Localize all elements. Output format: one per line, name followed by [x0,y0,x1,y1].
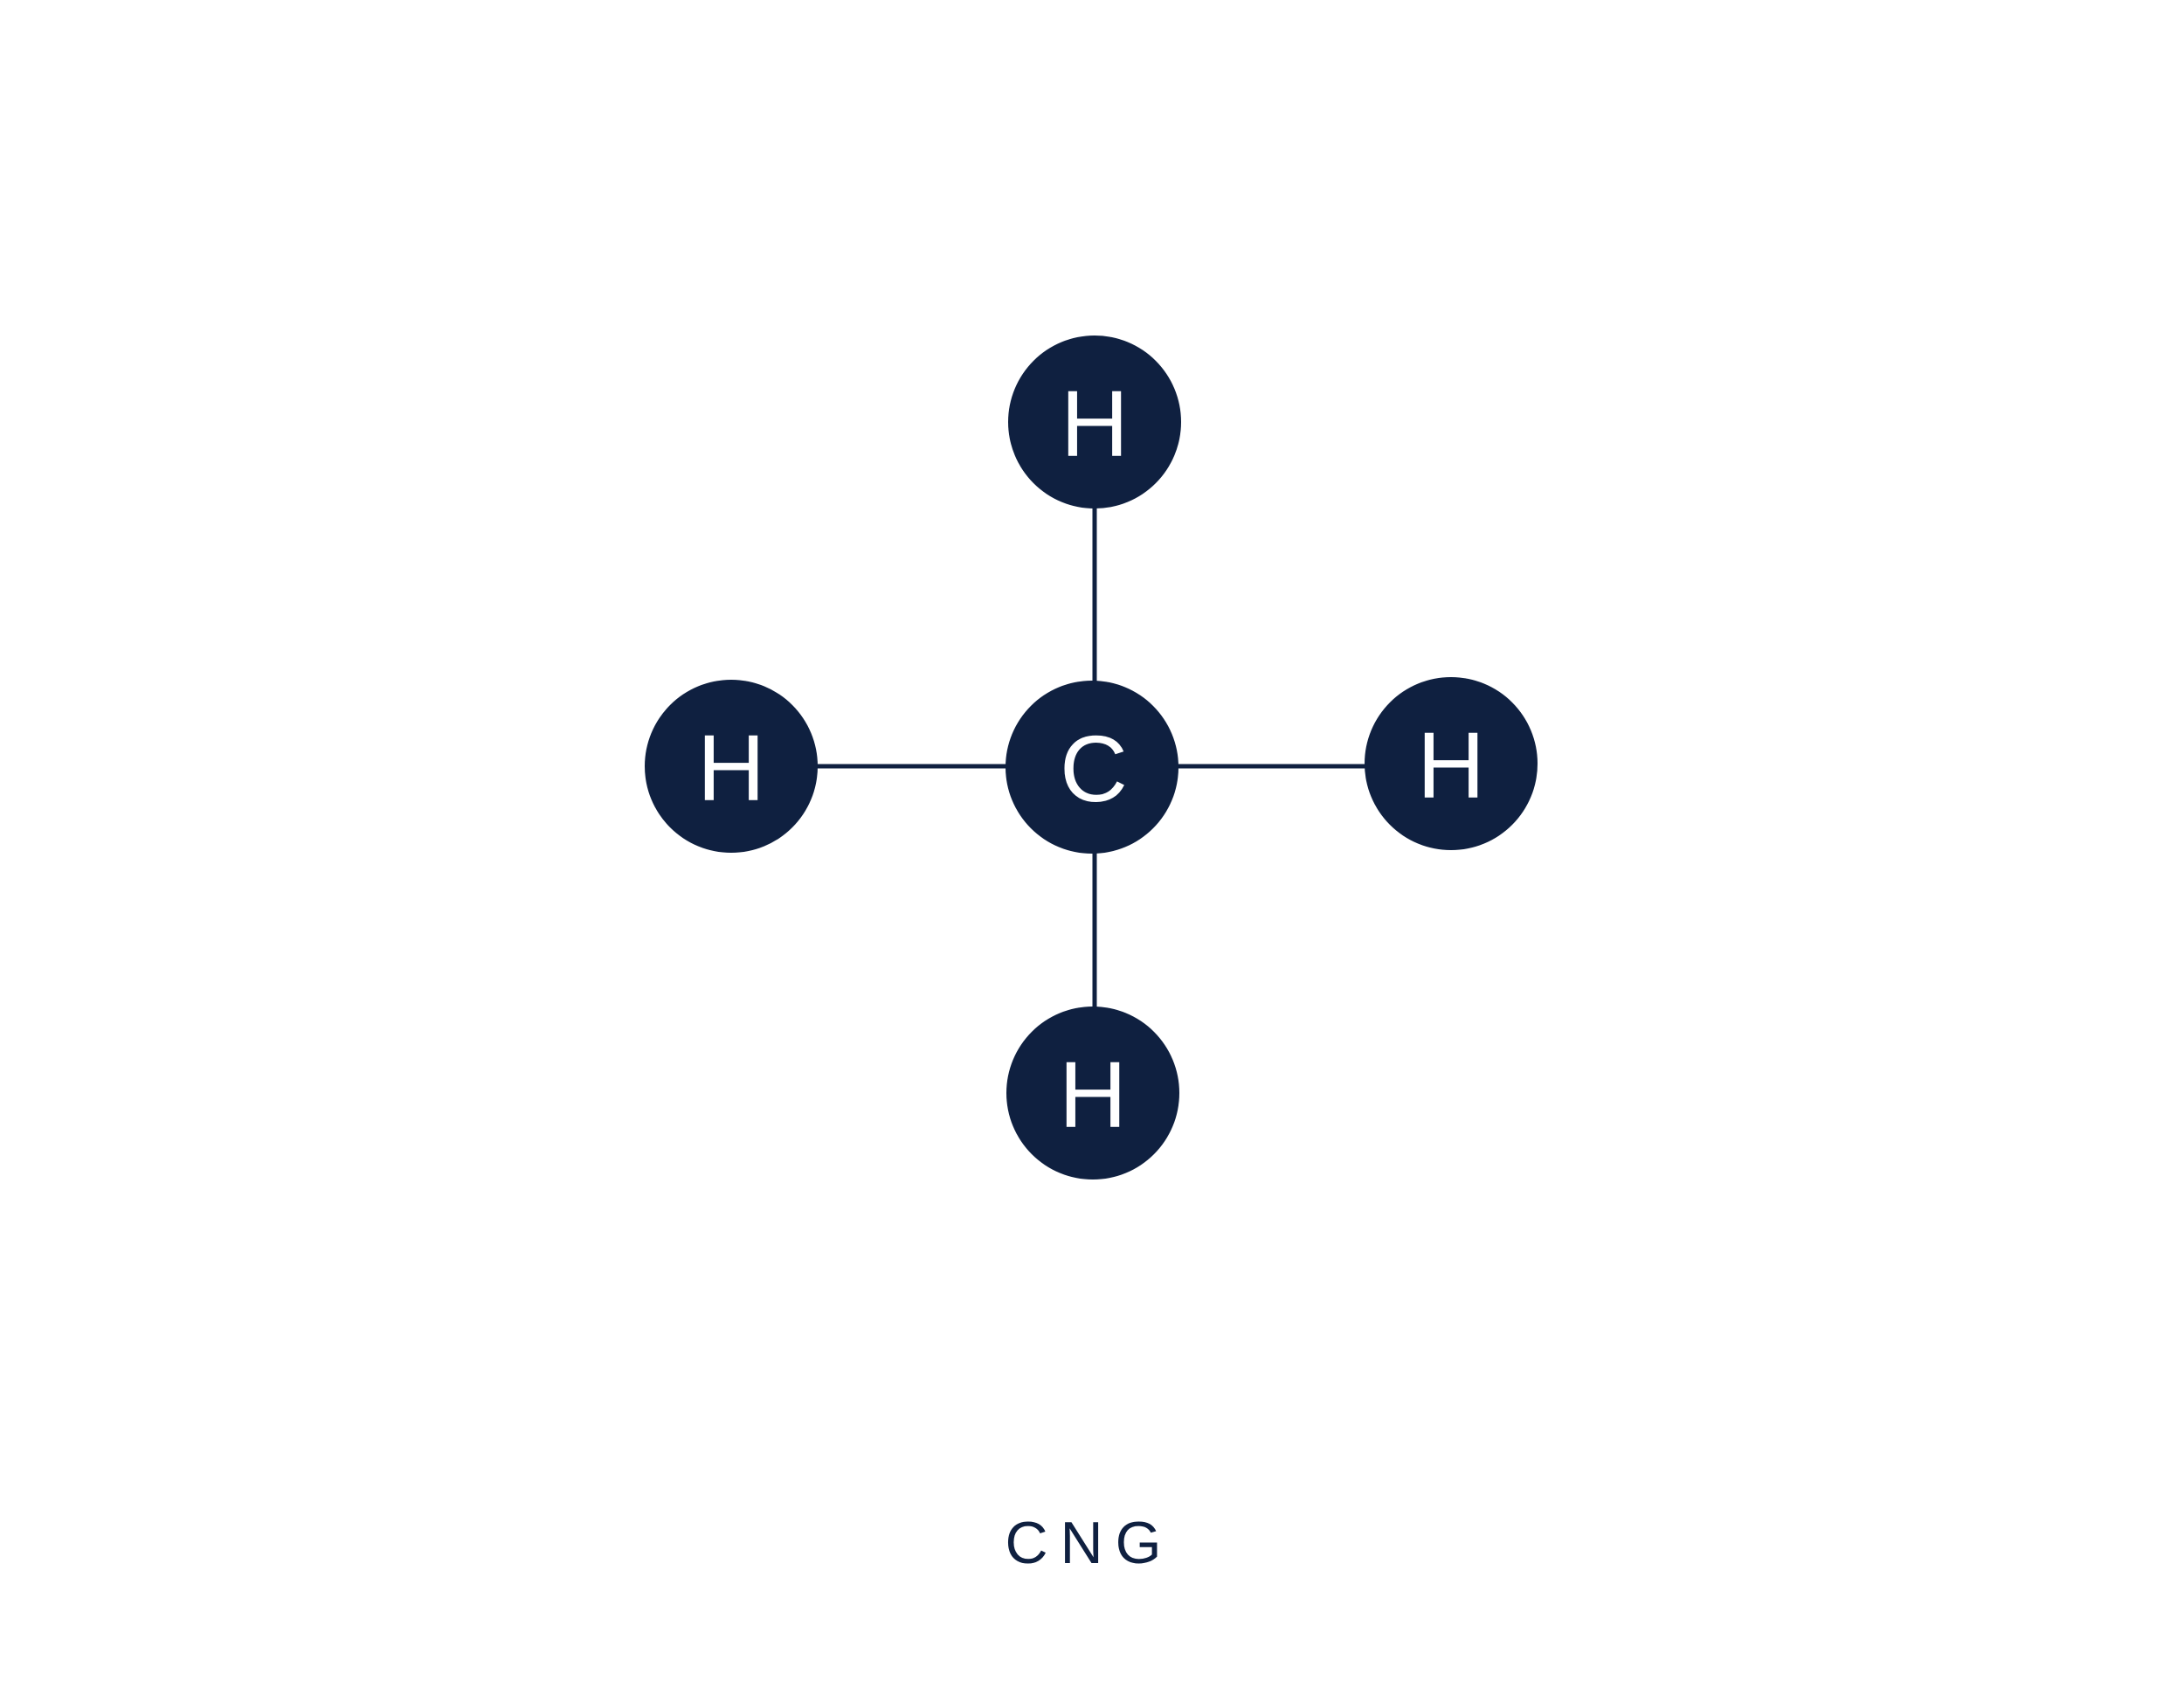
caption: CNG: CNG [1005,1510,1174,1576]
atom: carbon center: C [1060,716,1128,821]
atom: left hydrogen: H [697,715,765,820]
bond: horizontal [731,764,1451,769]
molecule: methane diagram [645,336,1538,1180]
atom: bottom hydrogen: H [1059,1041,1127,1147]
atom: right hydrogen [1365,677,1538,850]
atom: left hydrogen [645,680,818,853]
atom: bottom hydrogen [1006,1007,1179,1180]
atom: carbon center [1006,681,1178,854]
atom: top hydrogen [1008,336,1181,508]
atom: top hydrogen: H [1061,370,1129,476]
atom: right hydrogen: H [1417,712,1485,818]
bond: vertical [1092,422,1097,1093]
